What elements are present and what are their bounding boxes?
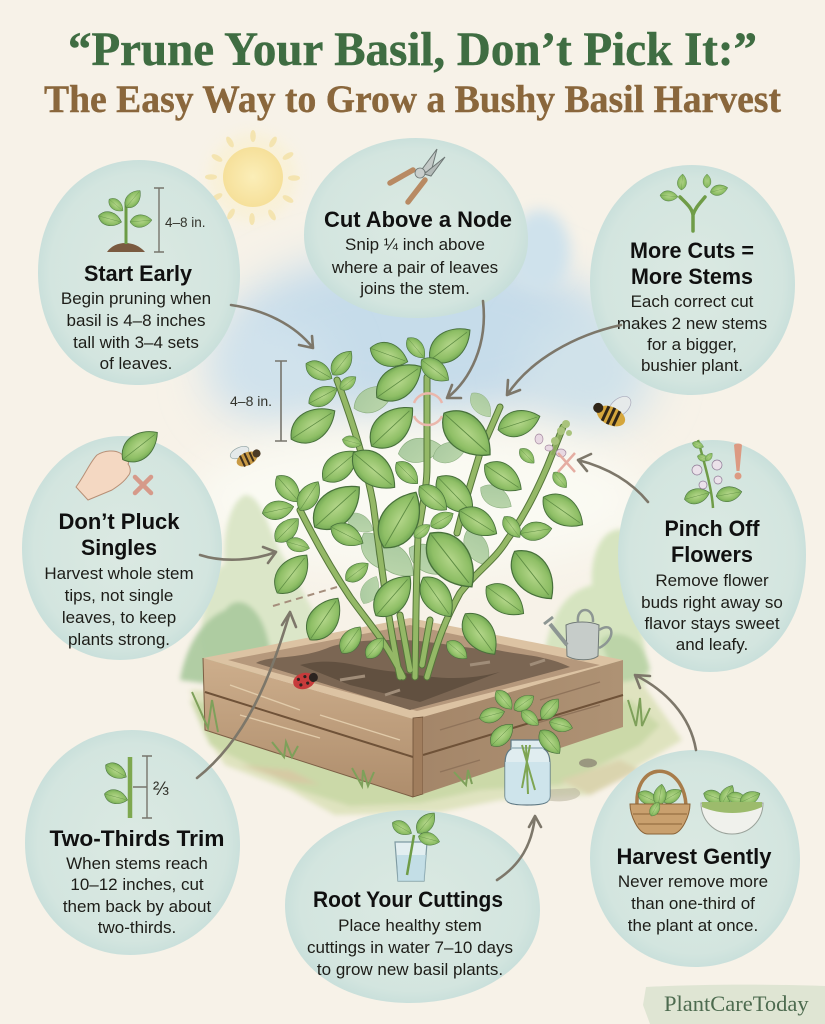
heading: Harvest Gently (616, 844, 772, 869)
basil plant (260, 319, 591, 677)
arrow: start early to plant (231, 305, 313, 348)
heading line 2: Flowers (671, 542, 753, 567)
icon: hand holding leaf (76, 423, 165, 500)
body text: the plant at once. (628, 916, 758, 935)
body text: and leafy. (676, 635, 748, 654)
arrow: harvest to bed (635, 675, 696, 750)
icon: watering can (544, 610, 611, 660)
heading: Don’t Pluck (58, 509, 180, 534)
arrow: flowers to spike (578, 454, 648, 502)
body text: Never remove more (618, 872, 768, 891)
arrow: pluck to plant (200, 547, 276, 563)
icon: pruners (390, 149, 445, 202)
height bracket (230, 361, 287, 441)
body text: to grow new basil plants. (317, 960, 503, 979)
measure: two thirds: ⅔ (153, 779, 169, 800)
icon: bee left (228, 440, 263, 471)
body text: where a pair of leaves (331, 258, 498, 277)
panel: pinch off flowers (618, 440, 806, 672)
measure: 4-8 in: 4–8 in. (165, 215, 206, 230)
body text: tall with 3–4 sets (73, 333, 199, 352)
heading: Root Your Cuttings (313, 887, 503, 912)
heading: Two-Thirds Trim (50, 826, 224, 851)
pink cut marker (414, 393, 442, 425)
body text: them back by about (63, 897, 211, 916)
panel: two-thirds trim (25, 730, 240, 955)
panel: root your cuttings (285, 808, 540, 1003)
rock (579, 758, 597, 768)
panel: cut above a node (304, 138, 528, 318)
icon: stem (102, 757, 130, 818)
body text: leaves, to keep (62, 608, 176, 627)
icon: bee right (589, 383, 638, 431)
body text: 10–12 inches, cut (70, 875, 204, 894)
bed post (413, 717, 423, 797)
measure: two thirds (133, 756, 169, 818)
heading: Pinch Off (664, 516, 760, 541)
icon: exclamation (734, 444, 742, 480)
body text: than one-third of (631, 894, 755, 913)
body text: flavor stays sweet (644, 614, 780, 633)
icon: basket (630, 771, 690, 834)
icon: branching stem (660, 174, 729, 231)
raised garden bed (192, 618, 650, 797)
body text: Harvest whole stem (44, 564, 194, 583)
mason jar with basil (478, 686, 580, 805)
body text: of leaves. (100, 354, 172, 373)
stems (300, 377, 563, 677)
watercolor sky (190, 210, 655, 570)
icon: seedling (97, 187, 153, 252)
heading: Start Early (84, 261, 193, 286)
background bushes (180, 495, 650, 700)
dashed cut line (273, 587, 337, 606)
icon: bowl (701, 782, 763, 834)
panel: harvest gently (590, 750, 800, 967)
body text: bushier plant. (641, 356, 743, 375)
measure: 4-8 in (154, 188, 206, 252)
icon: flower stem (683, 440, 743, 508)
heading: More Cuts = (630, 238, 754, 263)
foreground leaves (260, 319, 591, 664)
logo badge: PlantCareToday (664, 991, 809, 1016)
body text: joins the stem. (359, 279, 470, 298)
icon: x (135, 477, 151, 493)
subtitle: The Easy Way to Grow a Bushy Basil Harvest (44, 78, 781, 121)
body text: Snip ¼ inch above (345, 235, 485, 254)
icon: ladybug (291, 670, 320, 692)
arrow: more cuts to plant (507, 325, 621, 395)
body text: buds right away so (641, 593, 783, 612)
body text: makes 2 new stems (617, 314, 767, 333)
body text: basil is 4–8 inches (67, 311, 205, 330)
body text: plants strong. (68, 630, 170, 649)
heading: Cut Above a Node (324, 207, 512, 232)
pink x on flower (558, 453, 575, 472)
body text: Each correct cut (631, 292, 754, 311)
heading line 2: Singles (81, 535, 157, 560)
background leaves (343, 379, 516, 607)
height bracket: 4–8 in. (230, 393, 272, 409)
bed right face (423, 660, 623, 794)
body text: cuttings in water 7–10 days (307, 938, 513, 957)
sun (205, 130, 300, 225)
body text: two-thirds. (98, 918, 176, 937)
body text: Place healthy stem (338, 916, 482, 935)
flower spike (535, 420, 572, 457)
panel: more cuts (590, 165, 795, 395)
arrow: two thirds to stem (197, 612, 296, 778)
body text: Remove flower (655, 571, 769, 590)
icon: cutting in glass (389, 808, 441, 881)
title: “Prune Your Basil, Don’t Pick It:” (68, 23, 757, 76)
arrow: node to cut marker (447, 301, 484, 398)
bed left face (203, 658, 417, 797)
panel: start early (38, 160, 240, 385)
arrow: root to jar (497, 816, 541, 880)
body text: When stems reach (66, 854, 208, 873)
logo badge (643, 985, 825, 1024)
ground (190, 680, 682, 815)
grass tufts (192, 692, 650, 786)
body text: tips, not single (65, 586, 173, 605)
body text: for a bigger, (647, 335, 737, 354)
body text: Begin pruning when (61, 289, 211, 308)
heading line 2: More Stems (631, 264, 753, 289)
panel: don't pluck singles (22, 423, 222, 660)
bed inner wall and soil (203, 618, 623, 720)
